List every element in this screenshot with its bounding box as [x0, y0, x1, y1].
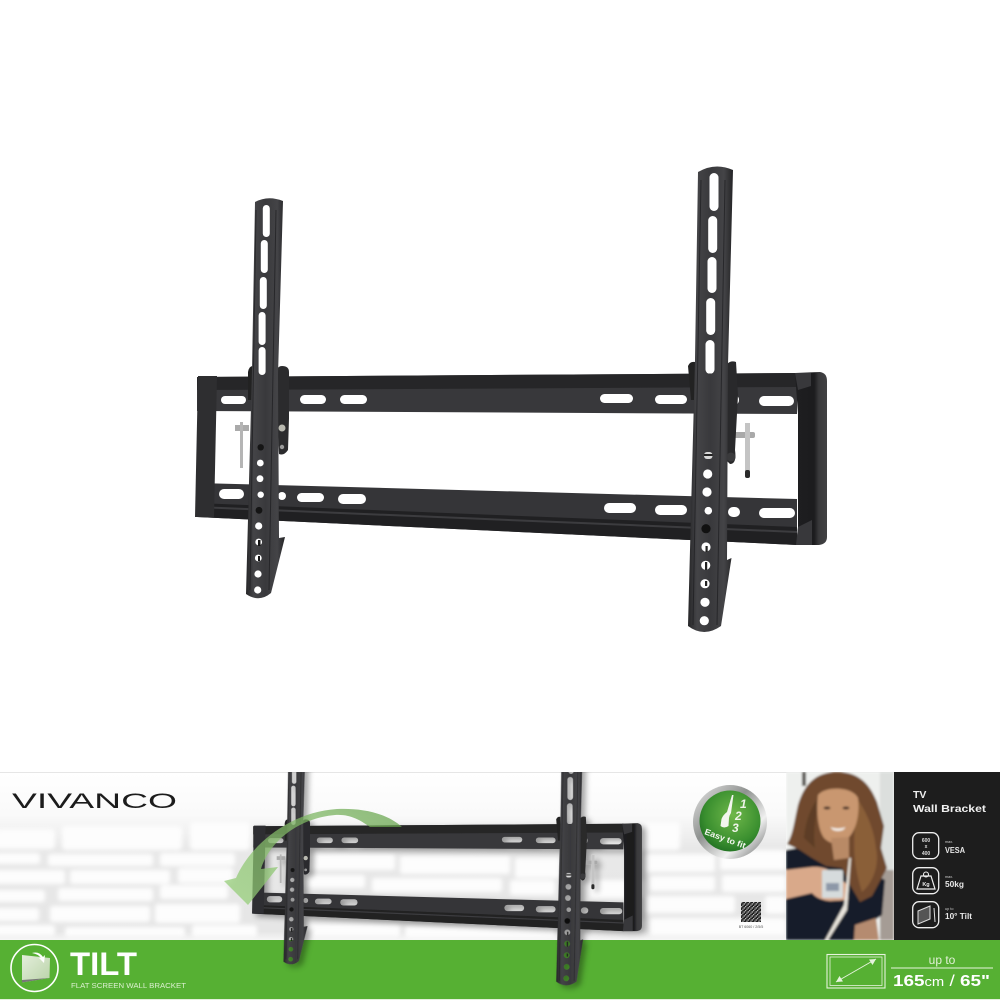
spec: VESA: VESA [945, 846, 965, 855]
screwdriver icon [720, 795, 734, 828]
main product photo: tilt wall bracket [195, 166, 827, 632]
step three: 3 [732, 821, 739, 835]
QR code [739, 902, 763, 929]
QR caption: BT 6060 / 2/5/5 [739, 925, 763, 929]
small bracket on wall [252, 772, 650, 992]
black specification panel [894, 772, 1000, 940]
icon: VESA size: x [925, 844, 928, 850]
left end cap [195, 376, 217, 517]
right tension pin [728, 423, 755, 478]
spec: tilt: 10° Tilt [945, 912, 972, 921]
spec: weight: max. [945, 875, 953, 879]
spec: tilt: up to [945, 907, 953, 911]
right arm clamp plate [688, 361, 738, 464]
panel heading: TV [913, 789, 926, 801]
white brick wall background [0, 821, 786, 940]
spec: weight [945, 876, 964, 888]
easy to fit badge [693, 785, 767, 859]
icon: screen size [827, 954, 885, 988]
divider rule [891, 968, 993, 969]
left vertical arm with slots and holes [246, 198, 285, 598]
icon: weight [913, 868, 939, 894]
icon: VESA size [913, 833, 939, 859]
icon: VESA size: 600 [922, 838, 930, 844]
icon: VESA size: 400 [922, 851, 930, 857]
spec: VESA [945, 841, 965, 853]
heading: TILT: TILT [70, 946, 137, 982]
left arm dark holes [256, 444, 264, 561]
step two: 2 [734, 809, 742, 823]
footer bottom edge [0, 999, 1000, 1000]
spec: weight: 50kg [945, 880, 964, 889]
horizontal rails [197, 373, 797, 545]
icon: product type [11, 944, 58, 992]
green footer band [0, 940, 1000, 999]
logo: VIVANCO: VIVANCO [12, 790, 177, 813]
right arm dark holes [701, 452, 712, 586]
subheading: FLAT SCREEN WALL BRACKET [71, 981, 186, 990]
icon: weight: Kg [922, 882, 930, 888]
right end cap [795, 372, 827, 545]
right vertical arm with slots and holes [688, 166, 733, 632]
maximum screen size: 165 cm / 65" [893, 973, 990, 990]
photo: woman with remote control [786, 772, 894, 940]
panel heading second line: Wall Bracket [913, 803, 987, 815]
left arm clamp plate [248, 366, 289, 454]
label: up to: up to [929, 953, 956, 967]
spec: tilt [945, 907, 972, 921]
packaging banner [0, 772, 1000, 1000]
steps 1 2 3: 1 [740, 797, 747, 811]
icon: tilt [913, 902, 939, 928]
banner top edge [0, 772, 894, 773]
badge caption: Easy to fit [703, 826, 747, 851]
green tilt arrow [224, 809, 402, 905]
left tension pin [235, 422, 249, 468]
spec: VESA: max. [945, 840, 953, 844]
